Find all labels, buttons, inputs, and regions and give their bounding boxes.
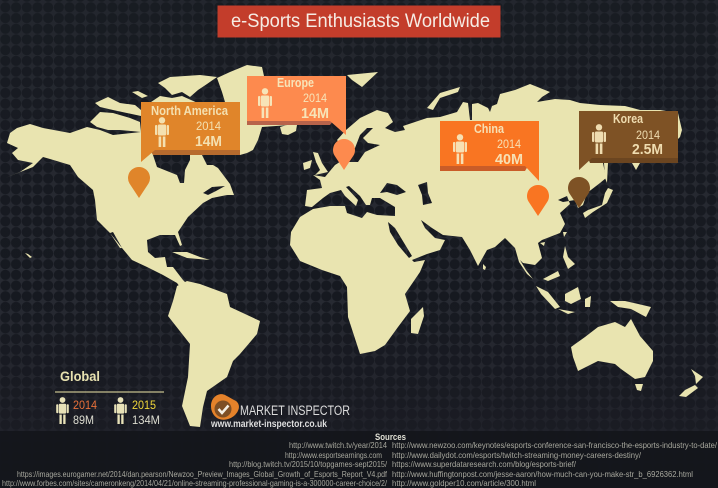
callout: China: 2014 bbox=[497, 137, 521, 151]
callout: Europe: 14M bbox=[301, 105, 329, 122]
callout: Europe bbox=[247, 76, 346, 135]
North America bbox=[5, 124, 234, 287]
Svalbard and Novaya Zemlya bbox=[347, 72, 460, 110]
callout: North America: 14M bbox=[195, 133, 222, 150]
pin: Korea bbox=[568, 177, 590, 208]
title banner bbox=[218, 6, 500, 38]
Japan and Sakhalin bbox=[583, 163, 613, 218]
callout: North America bbox=[141, 102, 240, 162]
Iceland, Britain and Ireland bbox=[280, 125, 328, 175]
global totals: 134M bbox=[132, 413, 160, 427]
pin: North America bbox=[128, 167, 150, 198]
global totals: Global bbox=[60, 368, 100, 384]
Madagascar bbox=[411, 307, 424, 334]
sources panel: http://www.forbes.com/sites/cameronkeng/2014/04/21/online-streaming-professional-gaming-is-a-300000-career-choice/2/ bbox=[2, 478, 388, 488]
pin: China bbox=[527, 185, 549, 216]
callout: China: 40M bbox=[495, 151, 523, 168]
callout: China: China bbox=[474, 122, 505, 136]
sources panel: http://www.esportsearnings.com bbox=[285, 450, 382, 460]
Cuba and Caribbean bbox=[172, 252, 210, 260]
global totals bbox=[55, 368, 164, 427]
callout: China bbox=[440, 121, 539, 181]
global totals: 2015 bbox=[132, 398, 156, 412]
callout: Korea bbox=[579, 111, 678, 170]
sources panel: http://www.goldper10.com/article/300.html bbox=[392, 478, 536, 488]
pin: Europe bbox=[333, 139, 355, 170]
logo: Market Inspector: MARKET INSPECTOR bbox=[240, 403, 350, 418]
callout: Europe: Europe bbox=[277, 76, 314, 90]
global totals: 2014 bbox=[73, 398, 97, 412]
logo: Market Inspector: www.market-inspector.co.uk bbox=[210, 419, 327, 430]
callout: Korea: Korea bbox=[613, 112, 644, 126]
Eurasia and Africa bbox=[290, 84, 682, 354]
Australia bbox=[571, 319, 653, 391]
Hawaii bbox=[25, 253, 32, 258]
sources panel: https://images.eurogamer.net/2014/dan.pearson/Newzoo_Preview_Images_Global_Growth_of_Esports_Report_V4.pdf bbox=[17, 469, 388, 479]
Arctic islands bbox=[90, 75, 217, 132]
callout: Europe: 2014 bbox=[303, 91, 327, 105]
sources panel: https://www.superdataresearch.com/blog/esports-brief/ bbox=[392, 459, 577, 469]
sources panel: Sources bbox=[375, 432, 406, 443]
sources panel: http://www.twitch.tv/year/2014 bbox=[289, 440, 387, 450]
New Zealand bbox=[679, 369, 703, 397]
world map bbox=[5, 65, 703, 427]
global totals: 89M bbox=[73, 413, 94, 427]
callout: North America: North America bbox=[151, 104, 229, 118]
sources panel: http://www.dailydot.com/esports/twitch-streaming-money-careers-destiny/ bbox=[392, 450, 642, 460]
callout: Korea: 2.5M bbox=[632, 142, 663, 158]
callout: Korea: 2014 bbox=[636, 128, 660, 142]
Greenland bbox=[217, 65, 300, 155]
sources panel: http://blog.twitch.tv/2015/10/topgames-sept2015/ bbox=[229, 459, 388, 469]
logo: Market Inspector bbox=[210, 394, 350, 430]
sources panel bbox=[0, 431, 718, 488]
callout: North America: 2014 bbox=[196, 119, 221, 133]
South America bbox=[168, 281, 260, 427]
title banner: e-Sports Enthusiasts Worldwide bbox=[231, 11, 490, 32]
Southeast Asia islands bbox=[483, 232, 651, 317]
